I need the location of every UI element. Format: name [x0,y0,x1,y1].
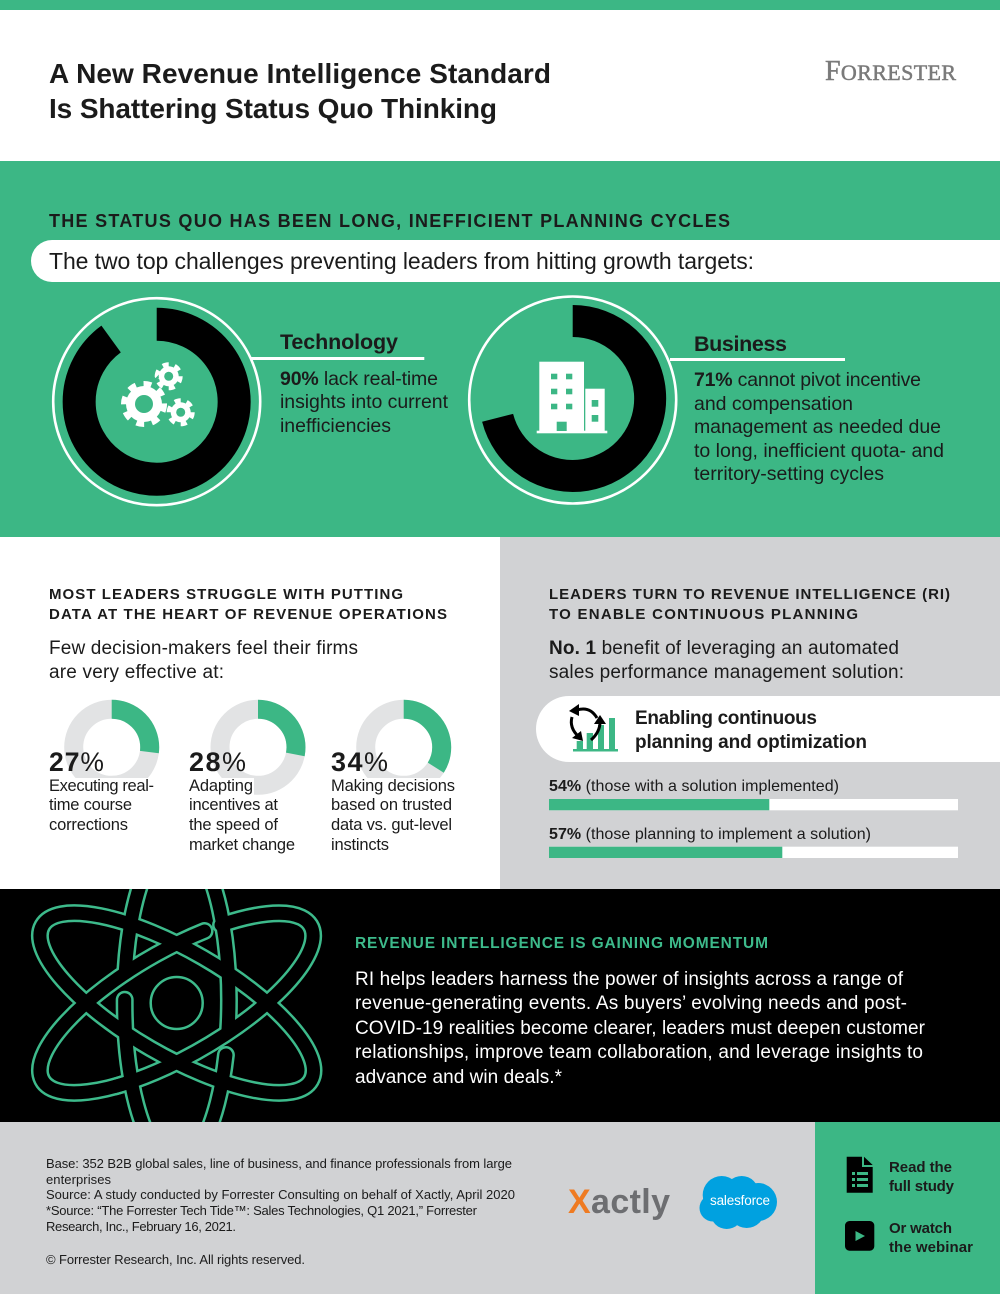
text: or watch the webinar [889,1220,973,1256]
paragraph: relationships, improve team collaboration, and leverage insights to [355,1042,923,1063]
donut: business 71% [469,296,676,504]
stat: 27%: time course [49,796,132,814]
white banner: The two top challenges preventing leaders from hitting growth targets: [49,248,754,274]
panel: continuous planning [500,537,1000,889]
white banner [536,696,1000,762]
text: read the full study [889,1159,955,1195]
source notes: enterprises [46,1172,112,1187]
stat: 27% [48,709,160,834]
intro text: No. 1 benefit of leveraging an automated [549,638,899,659]
white banner: Enabling continuous [635,708,817,729]
section heading: THE STATUS QUO HAS BEEN LONG, INEFFICIENT PLANNING CYCLES [49,211,730,231]
intro text [49,638,358,683]
icon: cycle and bars [569,704,618,752]
bar: 54% [549,778,958,810]
text: business: management as needed due [694,416,941,438]
stat: 28%: market change [189,836,295,854]
stat: 34%: 34% [331,747,388,777]
title [49,58,551,124]
heading [49,586,447,623]
stat: 28%: incentives at [189,796,278,814]
stat: 34%: data vs. gut-level [331,816,452,834]
text: business [670,332,944,485]
logo: salesforce [700,1176,777,1229]
heading: LEADERS TURN TO REVENUE INTELLIGENCE (RI) [549,586,950,603]
panel: footer [0,1122,815,1294]
stat: 28%: Adapting [189,777,253,795]
white banner [31,240,1000,282]
heading: TO ENABLE CONTINUOUS PLANNING [549,606,858,623]
icon: document [847,1157,873,1193]
paragraph: COVID-19 realities become clearer, leaders must deepen customer [355,1018,926,1039]
icon: play [845,1221,874,1251]
icon: buildings [537,362,607,433]
bar: 57%: 57% (those planning to implement a solution) [549,826,871,843]
white banner: planning and optimization [635,732,867,753]
stat: 34% [330,709,457,854]
stat: 28%: the speed of [189,816,278,834]
heading: REVENUE INTELLIGENCE IS GAINING MOMENTUM [355,935,768,952]
text: business: and compensation [694,393,853,415]
stat: 34%: based on trusted [331,796,452,814]
stat: 27%: corrections [49,816,128,834]
stat: 27%: 27% [49,747,104,777]
source notes: © Forrester Research, Inc. All rights reserved. [46,1252,305,1267]
paragraph [355,969,926,1088]
source notes: Source: A study conducted by Forrester Consulting on behalf of Xactly, April 2020 [46,1187,515,1202]
text: business: 71% cannot pivot incentive [694,369,921,391]
intro text [549,638,904,683]
logo: Xactly: Xactly [568,1183,670,1221]
heading: DATA AT THE HEART OF REVENUE OPERATIONS [49,606,447,623]
text: technology: 90% lack real-time [280,368,438,390]
panel: calls to action [815,1122,1000,1294]
text: technology [251,330,449,437]
panel: status quo challenges [0,161,1000,537]
text: or watch the webinar: the webinar [889,1239,973,1256]
intro text: are very effective at: [49,662,224,683]
source notes: Research, Inc., February 16, 2021. [46,1219,236,1234]
text: business: to long, inefficient quota- and [694,440,944,462]
logo: Forrester: FORRESTER [825,56,956,87]
source notes: Base: 352 B2B global sales, line of business, and finance professionals from large [46,1156,512,1171]
text: technology: inefficiencies [280,415,391,437]
stat: 27%: Executing real- [49,777,154,795]
paragraph: advance and win deals.* [355,1067,563,1088]
text: or watch the webinar: Or watch [889,1220,952,1237]
logo: salesforce: salesforce [710,1193,770,1208]
paragraph: RI helps leaders harness the power of insights across a range of [355,969,904,990]
text: business: Business [694,332,787,356]
paragraph: revenue-generating events. As buyers’ evolving needs and post- [355,993,907,1014]
intro text: sales performance management solution: [549,662,904,683]
text: technology: Technology [280,330,398,354]
source notes: *Source: “The Forrester Tech Tide™: Sales Technologies, Q1 2021,” Forrester [46,1203,478,1218]
stat: 34%: instincts [331,836,389,854]
stat: 28%: 28% [189,747,246,777]
donut: technology 90% [53,298,260,505]
title: A New Revenue Intelligence Standard [49,58,551,89]
text: technology: insights into current [280,391,449,413]
bar: 57% [549,826,958,858]
intro text: Few decision-makers feel their firms [49,638,358,659]
text: read the full study: Read the [889,1159,952,1176]
heading [549,586,950,623]
panel: leaders struggle [0,537,500,889]
bar: 54%: 54% (those with a solution implemented) [549,778,839,795]
source notes [46,1156,515,1267]
icon: gears [124,365,192,424]
panel: momentum [0,889,1000,1122]
text: read the full study: full study [889,1178,955,1195]
heading: MOST LEADERS STRUGGLE WITH PUTTING [49,586,403,603]
stat: 34%: Making decisions [331,777,455,795]
icon: atom [30,889,322,1122]
stat: 28% [188,709,296,854]
panel: header [0,0,1000,161]
text: business: territory-setting cycles [694,463,884,485]
title: Is Shattering Status Quo Thinking [49,93,497,124]
